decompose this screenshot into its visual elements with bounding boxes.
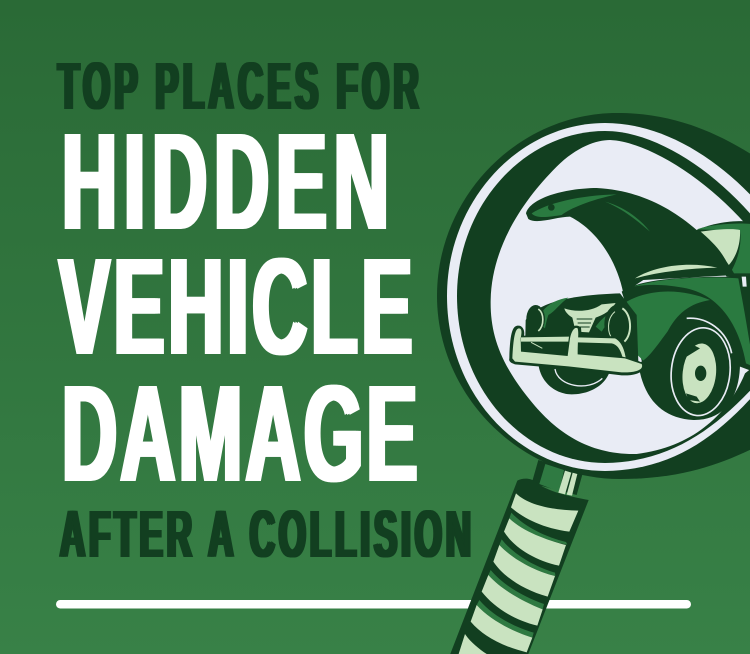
car: body — [622, 277, 750, 372]
lens white ring — [447, 123, 750, 471]
title line: damage: DAMAGE — [62, 357, 420, 511]
handle neck — [532, 460, 583, 496]
handle grip — [447, 479, 589, 654]
car: nose — [525, 293, 638, 362]
icon: magnifying glass lens — [437, 113, 750, 479]
title — [56, 49, 474, 572]
car: rear fender — [638, 306, 740, 420]
car: grille — [564, 303, 616, 332]
car: bumper — [509, 326, 645, 375]
lens outer rim — [437, 113, 750, 479]
divider bar — [56, 600, 691, 608]
title line: hidden: HIDDEN — [62, 105, 395, 259]
title line: after a collision: AFTER A COLLISION — [60, 497, 474, 572]
car: front end — [509, 293, 645, 394]
car: headlights — [526, 304, 632, 344]
car: open hood — [526, 188, 735, 293]
icon: magnifying glass handle — [447, 460, 589, 654]
car: cabin — [693, 221, 750, 280]
lens glass and car illustration — [491, 140, 750, 454]
lens inner dark band — [457, 131, 750, 463]
title line: top places for: TOP PLACES FOR — [58, 49, 423, 124]
car: rear wheel — [667, 318, 734, 418]
lens glass — [491, 140, 750, 454]
title line: vehicle: VEHICLE — [59, 230, 416, 384]
car: front wheel — [538, 363, 611, 394]
